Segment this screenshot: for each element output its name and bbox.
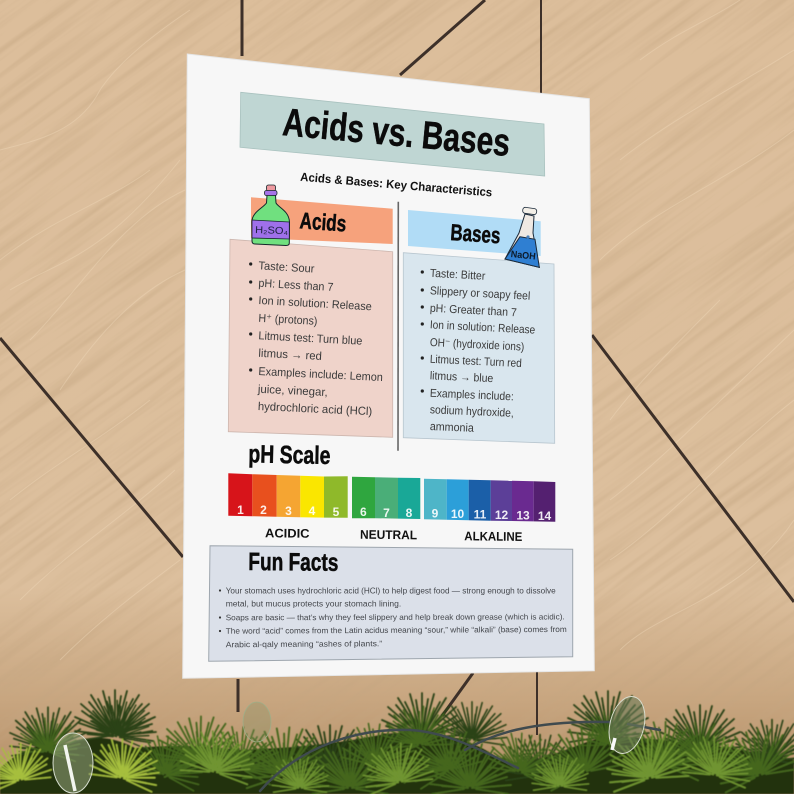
acidic segments: 1 <box>237 503 244 517</box>
subtitle: Acids & Bases: Key Characteristics <box>300 170 493 199</box>
icon: bottle: H₂SO₄ <box>255 225 288 237</box>
acids box <box>228 239 393 437</box>
bases list: Taste: Bitter <box>430 268 486 283</box>
bases list: Ion in solution: Release <box>430 319 536 337</box>
fun facts list: Soaps are basic — that’s why they feel slippery and help break down grease (which is acidic). <box>226 612 565 622</box>
centre divider <box>397 202 399 451</box>
chart: pH scale bars <box>228 473 555 523</box>
alkaline segments: 13 <box>516 508 530 522</box>
neutral segments: 7 <box>383 506 390 520</box>
acids list: Examples include: Lemon <box>258 366 383 384</box>
bases list <box>421 268 536 435</box>
fun facts heading: Fun Facts <box>248 548 338 577</box>
bulb: left <box>53 733 93 793</box>
panel: acids <box>228 185 393 437</box>
neutral segments: 8 <box>406 506 413 520</box>
neutral segments <box>352 477 420 520</box>
neutral segments: 6 <box>360 505 367 519</box>
icon: bottle <box>252 185 290 246</box>
bulb: centre <box>243 702 271 742</box>
acids list: juice, vinegar, <box>257 384 328 399</box>
acidic segments: 3 <box>285 504 292 518</box>
glass bulbs <box>53 693 651 793</box>
acids list: hydrochloric acid (HCl) <box>258 401 373 418</box>
acids list: litmus → red <box>258 348 322 363</box>
fun facts list: The word “acid” comes from the Latin acidus meaning “sour,” while “alkali” (base) comes from <box>226 625 567 636</box>
heading: pH scale: pH Scale <box>248 440 331 470</box>
lime tufts <box>179 725 758 794</box>
bulb: right <box>603 693 651 757</box>
bases header <box>408 210 541 256</box>
panel: fun facts <box>209 546 573 661</box>
fun facts list: Your stomach uses hydrochloric acid (HCl) to help digest food — strong enough to dissolve <box>226 586 556 595</box>
acids list: pH: Less than 7 <box>258 278 334 294</box>
acids list <box>249 260 383 418</box>
icon: flask <box>505 207 539 267</box>
bases list: pH: Greater than 7 <box>430 303 517 319</box>
bases list: OH⁻ (hydroxide ions) <box>430 337 525 354</box>
alkaline segments: 12 <box>495 508 508 522</box>
scale labels: ACIDIC <box>265 526 310 541</box>
alkaline segments: 9 <box>432 506 439 520</box>
scale labels <box>265 526 522 544</box>
bases list: ammonia <box>430 421 475 435</box>
alkaline segments: 10 <box>451 507 464 521</box>
poster sheet <box>183 54 594 678</box>
alkaline segments: 11 <box>474 508 487 522</box>
acids list: Taste: Sour <box>258 260 315 276</box>
mid tufts <box>18 701 794 794</box>
title: Acids vs. Bases <box>281 101 512 165</box>
acidic segments <box>228 473 348 519</box>
acidic segments: 2 <box>260 503 267 517</box>
light string wire <box>260 722 660 791</box>
fun facts list: metal, but mucus protects your stomach lining. <box>226 600 401 609</box>
title banner <box>240 92 545 176</box>
acids list: Litmus test: Turn blue <box>258 330 363 348</box>
acids list: Ion in solution: Release <box>258 295 372 313</box>
fun facts list: Arabic al-qaly meaning “ashes of plants.” <box>226 639 383 649</box>
acids header: Acids <box>299 207 347 237</box>
acidic segments: 4 <box>309 504 316 518</box>
alkaline segments: 14 <box>538 509 551 523</box>
pine garland foliage <box>0 690 794 794</box>
acids list: H⁺ (protons) <box>258 313 318 328</box>
dark back tufts <box>10 690 794 780</box>
bright tufts <box>0 732 166 793</box>
bases list: sodium hydroxide, <box>430 404 514 420</box>
bases list: Litmus test: Turn red <box>430 354 522 370</box>
bases box <box>403 253 555 443</box>
icon: flask: NaOH <box>510 249 536 263</box>
panel: bases <box>403 207 555 443</box>
alkaline segments <box>424 479 555 523</box>
bases list: litmus → blue <box>430 370 494 385</box>
scale labels: NEUTRAL <box>360 528 417 542</box>
acids header <box>251 197 393 244</box>
scale labels: ALKALINE <box>464 529 522 544</box>
fun facts list <box>219 586 567 649</box>
bases list: Examples include: <box>430 388 514 403</box>
bases header: Bases <box>450 219 501 248</box>
acidic segments: 5 <box>333 505 340 519</box>
bases list: Slippery or soapy feel <box>430 285 531 303</box>
